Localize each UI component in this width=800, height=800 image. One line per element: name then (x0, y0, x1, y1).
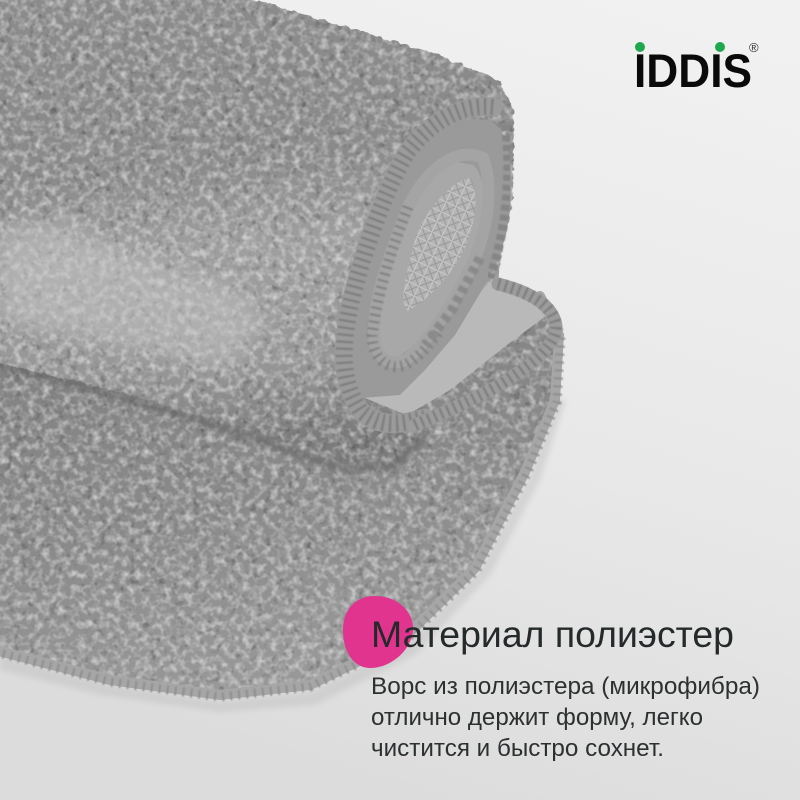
inner rim stitches (372, 207, 440, 367)
accent blob (343, 596, 413, 668)
right rim beads (490, 125, 508, 278)
flat lower mat (0, 296, 561, 697)
roll end (342, 118, 511, 398)
roll pile (0, 0, 514, 462)
logo dot right (715, 42, 725, 52)
mat border (0, 296, 559, 695)
logo (634, 40, 759, 97)
logo wordmark: IDDIS (634, 44, 752, 97)
mat border stitches (0, 298, 561, 697)
bead row (425, 258, 480, 345)
roll outer rim (344, 107, 493, 423)
backing pattern (403, 178, 476, 311)
fold rim stitches (415, 284, 556, 425)
roll crease shadow (0, 362, 425, 468)
mat backing band (365, 283, 547, 415)
outer rim stitches (344, 107, 493, 423)
body text (371, 673, 760, 762)
body line 1: Ворс из полиэстера (микрофибра) (371, 673, 760, 700)
mat pile (0, 300, 560, 696)
logo dot left (635, 42, 645, 52)
roll light patch (0, 222, 265, 370)
inner rim (374, 155, 489, 362)
registered mark: ® (749, 40, 759, 55)
body line 3: чистится и быстро сохнет. (371, 735, 664, 762)
rolled mat (0, 0, 556, 468)
heading: Материал полиэстер (371, 614, 734, 655)
inner backing (372, 160, 484, 362)
mat shadow (0, 400, 566, 712)
lower fold rim (415, 284, 556, 425)
body line 2: отлично держит форму, легко (371, 704, 703, 731)
